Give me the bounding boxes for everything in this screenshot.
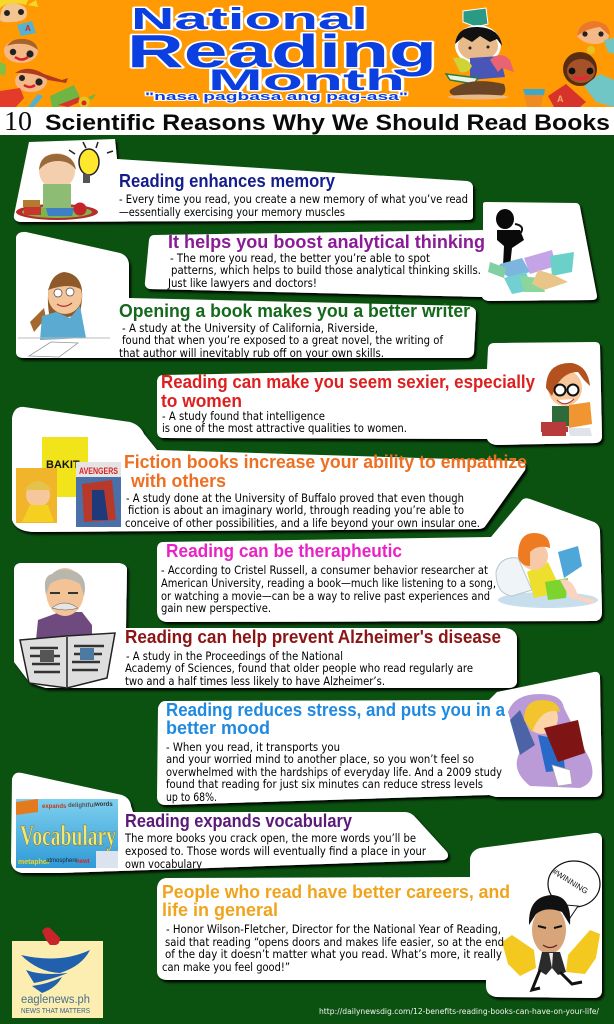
body text: is one of the most attractive qualities to women. (162, 421, 407, 435)
body text: two and a half times less likely to have Alzheimer’s. (125, 674, 385, 688)
heading: better mood (166, 718, 270, 738)
body text (166, 740, 502, 804)
icon: vocabulary collage: words (94, 802, 113, 808)
heading: Fiction books increase your ability to empathize (124, 452, 527, 472)
body text: Just like lawyers and doctors! (167, 276, 317, 290)
icon: thinking girl at desk (18, 272, 110, 357)
panel: better careers (157, 833, 602, 998)
body text: patterns, which helps to build those analytical thinking skills. (171, 263, 481, 277)
body text (119, 192, 468, 219)
panel: better writer (16, 232, 476, 360)
subtitle: "nasa pagbasa ang pag-asa" (145, 91, 408, 103)
icon: thinking woman and puzzle (488, 209, 574, 294)
panel: Alzheimer's (14, 563, 517, 688)
panel: analytical thinking (145, 202, 597, 301)
body text: fiction is about an imaginary world, through reading you’re able to (128, 503, 464, 517)
panel: therapeutic (157, 498, 602, 622)
body text: - A study at the University of California, Riverside, (122, 321, 378, 335)
body text: up to 68%. (166, 790, 217, 804)
icon: vocabulary collage: metaphor (18, 859, 50, 866)
heading: Reading expands vocabulary (125, 811, 352, 831)
icon: boy with glasses reading (541, 363, 592, 436)
icon: old man with newspaper (20, 568, 115, 688)
heading band (0, 106, 614, 136)
heading: Reading enhances memory (119, 171, 335, 191)
body text (125, 491, 480, 530)
body text: that author will inevitably rub off on your own skills. (119, 346, 384, 360)
body text: - Honor Wilson-Fletcher, Director for the National Year of Reading, (166, 922, 501, 936)
body text: said that reading “opens doors and makes life easier, so at the end (165, 935, 504, 949)
icon: girl reading on pillow (496, 533, 598, 608)
body text: own vocabulary (125, 857, 202, 871)
body text (162, 409, 407, 435)
panel: seem sexier (157, 342, 602, 445)
body text (161, 563, 496, 615)
icon: comic books (16, 437, 121, 527)
body text: American University, reading a book—much like listening to a song, (161, 576, 496, 590)
icon: man with foam fingers and speech bubble (502, 861, 600, 990)
body text: Academy of Sciences, found that older people who read regularly are (125, 661, 473, 675)
icon: vocabulary collage: newt (76, 859, 90, 865)
logo name: eaglenews.ph (21, 994, 90, 1006)
icon: children left (0, 0, 96, 108)
heading: People who read have better careers, and (162, 882, 510, 902)
icon: comic books: AVENGERS (79, 466, 118, 476)
heading (161, 372, 535, 411)
body text: The more books you crack open, the more words you’ll be (124, 831, 416, 845)
body text: and your worried mind to another place, so you won’t feel so (166, 752, 474, 766)
body text: gain new perspective. (161, 601, 271, 615)
icon: boy with light bulb (16, 142, 113, 220)
panel: reduces stress (157, 672, 602, 805)
body text: overwhelmed with the hardships of everyday life. And a 2009 study (166, 765, 502, 779)
logo note: eaglenews.ph (12, 927, 103, 1018)
body text: —essentially exercising your memory muscles (119, 205, 345, 219)
icon: red push pin (42, 927, 60, 945)
icon: vocabulary collage (16, 799, 118, 868)
body text: - The more you read, the better you’re able to spot (170, 251, 430, 265)
title: National Reading Month: National (131, 1, 368, 36)
body text: - Every time you read, you create a new memory of what you’ve read (119, 192, 468, 206)
header banner (0, 0, 614, 108)
body text: - A study in the Proceedings of the National (126, 649, 343, 663)
body text: - According to Cristel Russell, a consumer behavior researcher at (161, 563, 488, 577)
heading (124, 452, 527, 491)
body text: found that reading for just six minutes can reduce stress levels (166, 777, 483, 791)
heading: life in general (162, 900, 278, 920)
icon: vocabulary collage: atmosphere (46, 858, 78, 864)
body text: or watching a movie—can be a way to relive past experiences and (161, 589, 490, 603)
icon: boy hugging book in bed (508, 694, 592, 788)
heading: Reading can be therapheutic (166, 541, 402, 561)
body text: - When you read, it transports you (166, 740, 340, 754)
heading band: Scientific Reasons Why We Should Read Books (45, 110, 610, 135)
heading: It helps you boost analytical thinking (168, 232, 485, 252)
icon: children left: A (25, 24, 31, 33)
body text: conceive of other possibilities, and a life beyond your own insular one. (125, 516, 480, 530)
heading: Reading can make you seem sexier, especially (161, 372, 535, 392)
body text: - A study found that intelligence (162, 409, 325, 423)
body text (162, 922, 504, 974)
icon: eagle wings (21, 950, 90, 993)
icon: children right (523, 21, 614, 107)
body text: can make you feel good!” (162, 960, 290, 974)
title: National Reading Month: Month (208, 64, 405, 97)
body text (119, 321, 444, 360)
heading: Reading reduces stress, and puts you in a (166, 700, 506, 720)
icon: comic books: BAKIT (46, 459, 80, 471)
heading: Opening a book makes you a better writer (119, 301, 470, 321)
logo tagline: NEWS THAT MATTERS (21, 1006, 90, 1015)
body text: - A study done at the University of Buffalo proved that even though (126, 491, 464, 505)
icon: man with foam fingers and speech bubble: #WINNING (551, 867, 590, 896)
body text: found that when you’re exposed to a great novel, the writing of (122, 333, 444, 347)
icon: reading boy (446, 8, 514, 100)
heading (162, 882, 510, 920)
icon: children right: A (557, 94, 564, 104)
heading: Reading can help prevent Alzheimer's disease (125, 627, 501, 647)
body text: of the day it doesn’t matter what you read. What’s more, it really (165, 947, 502, 961)
heading band: 10 (4, 106, 32, 136)
panel: reading enhances memory (14, 139, 473, 222)
icon: vocabulary collage: expands (42, 804, 67, 810)
body text (125, 649, 473, 688)
icon: vocabulary collage: Vocabulary (20, 820, 116, 852)
source url: http://dailynewsdig.com/12-benefits-reading-books-can-have-on-your-life/ (319, 1007, 599, 1016)
title: National Reading Month (127, 1, 437, 97)
title: National Reading Month: Reading (127, 25, 437, 77)
body text (124, 831, 426, 871)
body text (167, 251, 481, 290)
heading: to women (161, 391, 242, 411)
icon: vocabulary collage: delightful (68, 803, 95, 809)
heading: with others (130, 471, 226, 491)
panel: empathize (12, 407, 527, 532)
panel: expands vocabulary (11, 773, 448, 873)
heading (166, 700, 506, 738)
body text: exposed to. Those words will eventually find a place in your (125, 844, 426, 858)
